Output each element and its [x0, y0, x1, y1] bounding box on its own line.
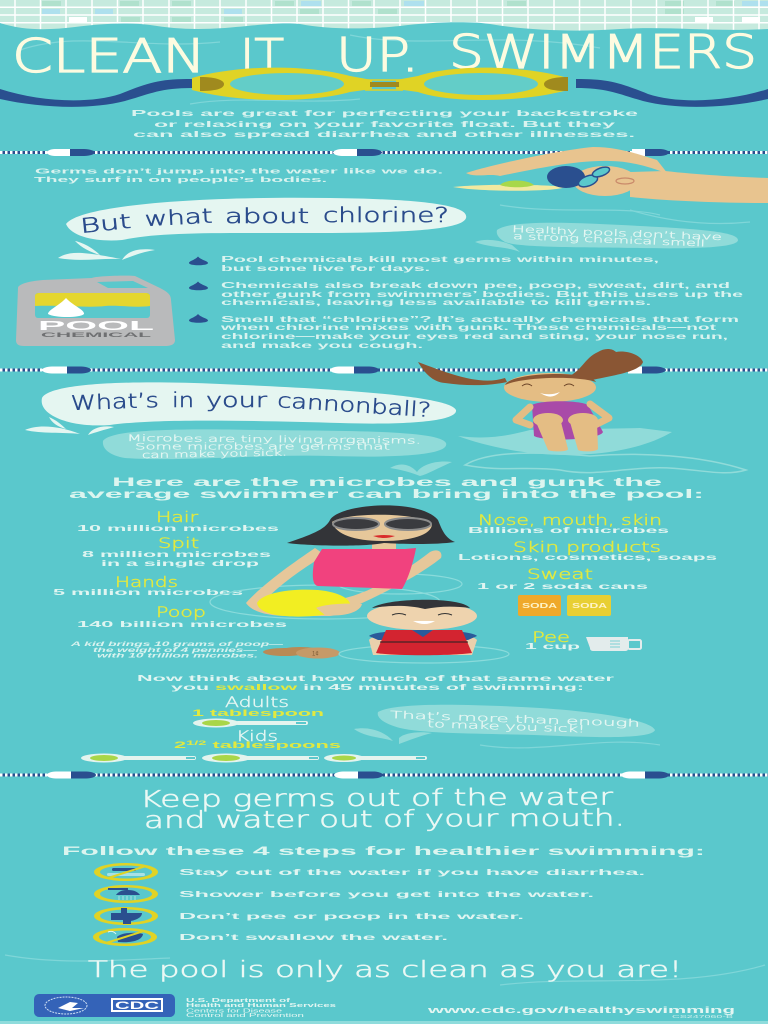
website url: www.cdc.gov/healthyswimming	[426, 1005, 735, 1015]
slogan: keep germs out	[140, 785, 625, 834]
callout: microbes	[103, 429, 452, 476]
HHS text: U.S. Department of	[186, 998, 291, 1004]
illustration: woman with ball	[210, 505, 462, 619]
germs text	[34, 166, 443, 184]
illustration: kid in life vest	[339, 600, 509, 663]
left microbe list: Hair	[156, 510, 198, 526]
bullet text: chemicals, leaving less available to kill germs.	[221, 298, 651, 307]
germs text: Germs don’t jump into the water like we do.	[35, 166, 443, 176]
HHS text	[186, 998, 336, 1019]
callout: microbes: can make you sick.	[142, 448, 287, 461]
right microbe list: 1 or 2 soda cans	[477, 582, 649, 591]
bullet list: chlorine facts	[189, 255, 744, 350]
left microbe list: 140 billion microbes	[77, 620, 288, 629]
title: CLEAN	[12, 29, 206, 83]
left microbe list	[53, 510, 288, 660]
spoon 1	[81, 754, 196, 762]
adults tablespoon: 1 tablespoon	[192, 708, 324, 718]
bullet text: chlorine—make your eyes red and sting, your nose run,	[221, 332, 728, 341]
left microbe list: 8 million microbes	[82, 550, 272, 559]
step 3	[94, 907, 524, 925]
icon: pool chemical jug: POOL	[38, 318, 154, 333]
CDC logo	[34, 994, 175, 1017]
callout: microbes: Microbes are tiny living organisms.	[127, 434, 421, 447]
step 2	[94, 885, 594, 903]
spoon	[193, 718, 308, 728]
icon: soda cans: SODA	[522, 603, 557, 610]
icon: pool chemical jug	[16, 276, 175, 346]
title: SWIMMERS	[449, 25, 757, 79]
slogan: keep germs out: and water out of your mouth.	[144, 805, 625, 834]
section heading: microbes: Here are the microbes and gunk the	[112, 475, 663, 489]
icon: toilet	[94, 907, 158, 925]
step 1: Stay out of the water if you have diarrhea.	[179, 867, 645, 877]
title: UP.	[336, 28, 419, 82]
intro text: Pools are great for perfecting your backstroke	[131, 108, 639, 118]
left microbe list: Hands	[115, 575, 178, 591]
callout: sick: to make you sick!	[427, 719, 585, 736]
bullet drop 2	[189, 282, 208, 290]
right microbe list: 1 cup	[525, 642, 580, 651]
right microbe list: Nose, mouth, skin	[478, 513, 662, 529]
icon: pool chemical jug: CHEMICAL	[41, 332, 151, 339]
lane rope 3	[0, 772, 768, 778]
speech bubble: cannonball: What’s	[70, 388, 159, 415]
HHS text: Health and Human Services	[186, 1003, 336, 1009]
intro text: or relaxing on your favorite float. But they	[154, 119, 616, 129]
left microbe list: 5 million microbes	[53, 588, 244, 597]
goggles	[0, 68, 768, 107]
lane rope 2	[0, 366, 768, 374]
icon: pennies: 1¢	[312, 652, 319, 658]
callout: healthy pools: a strong chemical smell	[513, 232, 705, 249]
left microbe list: in a single drop	[101, 559, 259, 568]
callout: healthy pools	[475, 223, 738, 252]
closing slogan: The pool is only as clean as you are!	[88, 958, 682, 983]
left microbe list: 10 million microbes	[77, 524, 280, 533]
speech bubble: cannonball: in	[172, 388, 194, 412]
bottom edge	[0, 1021, 768, 1024]
speech bubble: chlorine	[58, 198, 466, 260]
section heading: microbes: average swimmer can bring into the pool:	[69, 487, 704, 501]
HHS text: Control and Prevention	[186, 1013, 304, 1019]
adults tablespoon	[192, 695, 324, 728]
adults tablespoon: Adults	[225, 695, 289, 711]
intro text	[131, 108, 639, 139]
tile wall	[0, 0, 768, 34]
speech bubble: cannonball: your	[206, 388, 268, 412]
step 1	[94, 863, 645, 881]
speech bubble: chlorine: But	[79, 209, 132, 238]
kids tablespoons: tablespoons	[206, 740, 341, 750]
icon: measuring cup	[586, 637, 641, 651]
kids tablespoons: 2	[174, 740, 179, 750]
icon: no diarrhea swimming	[94, 863, 158, 881]
right microbe list: Pee	[532, 630, 570, 646]
step 4: Don’t swallow the water.	[179, 932, 448, 942]
bullet text	[219, 255, 744, 350]
swallow text	[137, 673, 616, 692]
title	[12, 25, 757, 83]
bullet text: Chemicals also break down pee, poop, sweat, dirt, and	[221, 281, 730, 290]
bullet text: when chlorine mixes with gunk. These chemicals—not	[219, 323, 717, 332]
title: IT	[240, 29, 284, 83]
illustration: girl cannonball	[418, 349, 746, 473]
spoon 2	[202, 754, 319, 762]
HHS text: Centers for Disease	[186, 1008, 282, 1014]
right microbe list: Lotions, cosmetics, soaps	[458, 553, 718, 562]
germs text: They surf in on people’s bodies.	[34, 175, 327, 184]
intro text: can also spread diarrhea and other illnesses.	[133, 129, 635, 139]
step 4	[93, 928, 448, 946]
speech bubble: chlorine: what	[144, 203, 213, 231]
left microbe list: Spit	[158, 536, 199, 552]
icon: soda cans: SODA	[572, 603, 607, 610]
icon: soda cans	[518, 595, 611, 616]
section heading: microbes	[69, 475, 704, 501]
left microbe list: A kid brings 10 grams of poop—	[69, 642, 285, 648]
document code: CS247060-B	[672, 1014, 733, 1019]
step 2: Shower before you get into the water.	[179, 889, 594, 899]
kids tablespoons	[81, 729, 427, 762]
swimmer	[453, 147, 768, 203]
right microbe list: Sweat	[527, 567, 593, 583]
swallow text: Now think about how much of that same water	[137, 673, 616, 683]
callout: sick	[354, 705, 655, 744]
callout: sick: That’s more than enough	[390, 710, 640, 730]
speech bubble: cannonball: cannonball?	[277, 388, 432, 422]
speech bubble: chlorine: chlorine?	[323, 203, 449, 227]
bullet drop 1	[189, 256, 208, 265]
right microbe list	[458, 513, 718, 651]
callout: microbes: Some microbes are germs that	[135, 442, 391, 452]
speech bubble: cannonball	[25, 382, 456, 435]
bullet text: but some live for days.	[221, 264, 430, 273]
slogan: keep germs out: Keep germs out of the water	[140, 785, 614, 813]
lane rope 1	[0, 149, 768, 156]
left microbe list: Poop	[156, 605, 206, 621]
step 3: Don’t pee or poop in the water.	[179, 911, 524, 921]
callout: healthy pools: Healthy pools don’t have	[512, 225, 722, 243]
kids tablespoons: 1/2	[186, 741, 208, 747]
bullet text: other gunk from swimmers’ bodies. But this uses up the	[221, 290, 744, 299]
icon: no swallowing	[93, 928, 157, 946]
bullet drop 3	[189, 314, 208, 323]
bullet text: Pool chemicals kill most germs within minutes,	[221, 255, 659, 264]
left microbe list: the weight of 4 pennies—	[93, 648, 259, 654]
heading: 4 steps: Follow these 4 steps for healthier swimming:	[62, 844, 705, 858]
right microbe list: Billions of microbes	[468, 526, 670, 535]
kids tablespoons: Kids	[236, 729, 278, 745]
icon: pennies	[263, 647, 340, 658]
speech bubble: chlorine: about	[225, 204, 309, 228]
left microbe list: with 10 trillion microbes.	[97, 654, 259, 660]
spoon 3	[324, 754, 427, 762]
CDC logo: CDC	[115, 1000, 159, 1012]
swallow text: you swallow in 45 minutes of swimming:	[171, 682, 584, 692]
icon: shower	[94, 885, 158, 903]
bullet text: and make you cough.	[221, 341, 423, 350]
right microbe list: Skin products	[513, 540, 661, 556]
bullet text: Smell that “chlorine”? It’s actually chemicals that form	[221, 315, 739, 324]
